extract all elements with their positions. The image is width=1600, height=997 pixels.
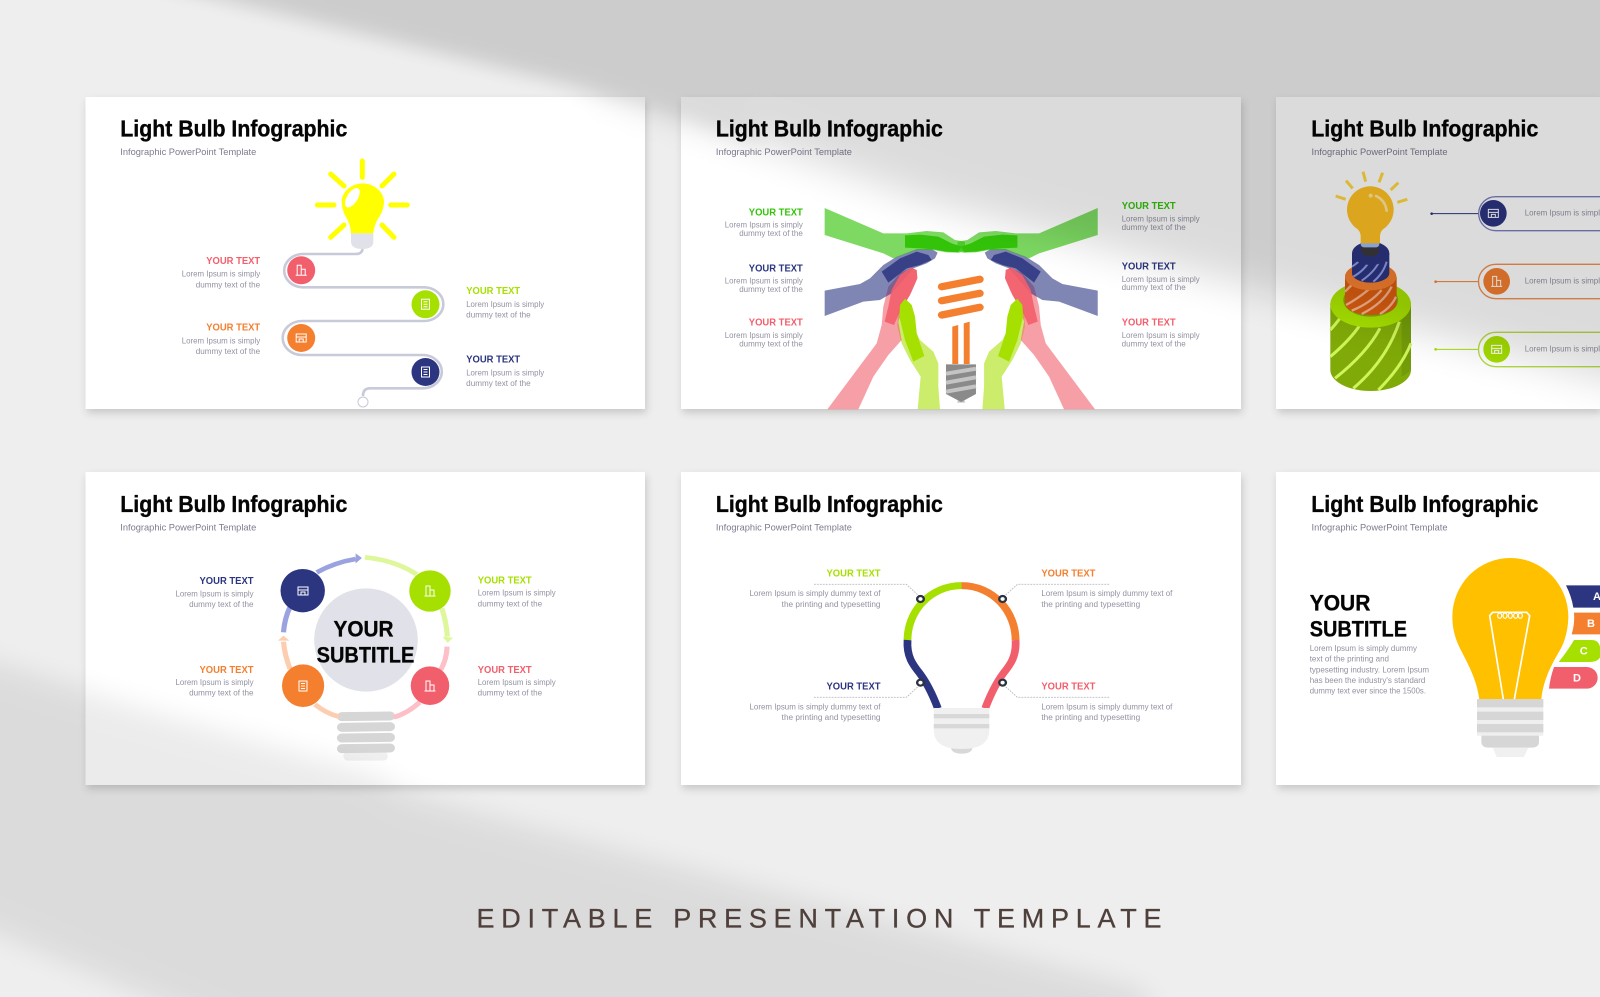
center subtitle (317, 617, 414, 668)
subtitle heading: YOUR (1310, 591, 1371, 616)
labels right green: Lorem Ipsum is simply (1122, 215, 1200, 224)
labels left navy: dummy text of the (739, 285, 803, 294)
title: Light Bulb Infographic (1311, 116, 1538, 142)
subtitle: Infographic PowerPoint Template (120, 147, 256, 158)
node 4 navy (412, 358, 440, 386)
illustration: hands (825, 208, 1098, 409)
labels right green: dummy text of the (1122, 223, 1186, 232)
text block orange (182, 321, 261, 356)
subtitle: Infographic PowerPoint Template (1312, 147, 1448, 158)
labels left green: dummy text of the (739, 229, 803, 238)
labels right red: Lorem Ipsum is simply (1122, 331, 1200, 340)
labels left red: dummy text of the (739, 339, 803, 348)
paragraph: has been the industry's standard (1310, 676, 1425, 685)
labels left red: Lorem Ipsum is simply (725, 331, 803, 340)
text block navy: Lorem Ipsum is simply (176, 589, 254, 598)
winding connector line (283, 249, 443, 396)
text block lime: Lorem Ipsum is simply (466, 300, 544, 309)
labels left navy: Lorem Ipsum is simply (725, 277, 803, 286)
title: Light Bulb Infographic (716, 491, 943, 517)
cycle diagram (278, 553, 453, 761)
text block lime (478, 574, 556, 608)
title: Light Bulb Infographic (120, 491, 347, 517)
cycle icons (298, 586, 436, 691)
labels right navy: dummy text of the (1122, 283, 1186, 292)
text block orange: Lorem Ipsum is simply (182, 336, 260, 345)
text block navy (176, 575, 254, 609)
labels left green: Lorem Ipsum is simply (725, 221, 803, 230)
title: Light Bulb Infographic (1311, 491, 1538, 517)
text block lime: YOUR TEXT (466, 285, 521, 297)
labels right green (1122, 200, 1200, 232)
text block navy: YOUR TEXT (200, 575, 254, 587)
labels left red: YOUR TEXT (749, 317, 803, 329)
subtitle: Infographic PowerPoint Template (716, 522, 852, 533)
text block red: YOUR TEXT (1041, 681, 1096, 693)
panel: circular cycle bulb (86, 472, 645, 785)
text block red: YOUR TEXT (206, 255, 261, 267)
illustration: bulb (942, 279, 980, 403)
text block red (478, 664, 556, 698)
option pill green (1434, 332, 1600, 367)
text block navy: YOUR TEXT (826, 681, 881, 693)
pill text: Lorem Ipsum is simpl (1525, 345, 1600, 354)
text block navy (750, 681, 881, 722)
subtitle: Infographic PowerPoint Template (120, 522, 256, 533)
labels right red: YOUR TEXT (1122, 317, 1176, 329)
panel: isometric bulb (1276, 97, 1600, 409)
labels right navy: YOUR TEXT (1122, 260, 1176, 272)
text block lime: Lorem Ipsum is simply dummy text of (750, 589, 881, 598)
text block lime: Lorem Ipsum is simply (478, 589, 556, 598)
labels right red: dummy text of the (1122, 339, 1186, 348)
paragraph: typesetting industry. Lorem Ipsum (1310, 665, 1429, 674)
option pill navy (1430, 197, 1600, 231)
tab letters: D (1573, 672, 1581, 684)
subtitle heading (1310, 591, 1407, 642)
text block orange: dummy text of the (196, 347, 261, 356)
node 1 red (287, 256, 315, 284)
center subtitle: YOUR (334, 617, 394, 642)
tab letters: C (1580, 646, 1588, 658)
labels right navy: Lorem Ipsum is simply (1122, 275, 1200, 284)
text block navy: Lorem Ipsum is simply (466, 368, 544, 377)
text block red: dummy text of the (478, 689, 543, 698)
labels left red (725, 317, 803, 348)
paragraph (1310, 644, 1429, 696)
text block red: dummy text of the (196, 280, 261, 289)
panel: winding path infographic (86, 97, 645, 409)
text block lime: YOUR TEXT (826, 567, 881, 579)
text block orange: YOUR TEXT (200, 664, 254, 676)
text block lime: the printing and typesetting (782, 600, 880, 609)
title: Light Bulb Infographic (716, 116, 943, 142)
text block red: YOUR TEXT (478, 664, 532, 676)
text block orange: Lorem Ipsum is simply (176, 678, 254, 687)
path end node (358, 397, 368, 407)
labels right red (1122, 317, 1200, 348)
text block lime: dummy text of the (478, 599, 543, 608)
pill text: Lorem Ipsum is simpl (1525, 209, 1600, 218)
text block navy: dummy text of the (189, 600, 254, 609)
text block orange: Lorem Ipsum is simply dummy text of (1041, 589, 1173, 598)
labels right green: YOUR TEXT (1122, 200, 1176, 212)
labels left navy: YOUR TEXT (749, 262, 803, 274)
tabs A B C D (1549, 585, 1600, 689)
text block red: Lorem Ipsum is simply (182, 270, 260, 279)
text block orange (1041, 567, 1173, 609)
text block lime: YOUR TEXT (478, 574, 532, 586)
text block lime (466, 285, 544, 320)
icon: glowing light bulb (317, 161, 407, 249)
text block red (182, 255, 261, 289)
paragraph: text of the printing and (1310, 655, 1389, 664)
labels left green (725, 206, 803, 238)
title: Light Bulb Infographic (120, 116, 347, 142)
subtitle: Infographic PowerPoint Template (1312, 522, 1448, 533)
text block red: Lorem Ipsum is simply dummy text of (1041, 702, 1173, 711)
pill text (1525, 209, 1600, 354)
pill text: Lorem Ipsum is simpl (1525, 277, 1600, 286)
tab letters (1573, 591, 1600, 684)
footer caption: EDITABLE PRESENTATION TEMPLATE (476, 903, 1162, 933)
panel: hands around bulb (681, 97, 1241, 409)
text block red (1041, 681, 1173, 722)
text block navy (466, 353, 544, 388)
text block navy: Lorem Ipsum is simply dummy text of (750, 702, 881, 711)
text block red: the printing and typesetting (1041, 713, 1140, 722)
text block lime: dummy text of the (466, 311, 531, 320)
node 3 orange (287, 324, 315, 352)
text block red: Lorem Ipsum is simply (478, 678, 556, 687)
text block orange: the printing and typesetting (1041, 600, 1140, 609)
text block lime (750, 567, 881, 609)
tab letters: B (1587, 618, 1595, 630)
paragraph: Lorem Ipsum is simply dummy (1310, 644, 1417, 653)
labels right navy (1122, 260, 1200, 292)
node 2 lime (412, 290, 440, 318)
subtitle: Infographic PowerPoint Template (716, 147, 852, 158)
text block navy: the printing and typesetting (782, 713, 880, 722)
big bulb (1452, 558, 1568, 757)
paragraph: dummy text ever since the 1500s. (1310, 687, 1426, 696)
text block orange: YOUR TEXT (1041, 567, 1096, 579)
text block orange (176, 664, 254, 698)
labels left navy (725, 262, 803, 294)
panel: big yellow bulb (1276, 472, 1600, 785)
illustration: isometric bulb on cylinders (1330, 172, 1411, 391)
panel: outline bulb (681, 472, 1241, 785)
text block orange: YOUR TEXT (206, 321, 261, 333)
text block navy: YOUR TEXT (466, 353, 521, 365)
center subtitle: SUBTITLE (317, 643, 414, 668)
outline bulb diagram (814, 584, 1109, 754)
subtitle heading: SUBTITLE (1310, 617, 1407, 642)
text block navy: dummy text of the (466, 379, 531, 388)
option pill orange (1434, 264, 1600, 299)
text block orange: dummy text of the (189, 689, 254, 698)
labels left green: YOUR TEXT (749, 206, 803, 218)
